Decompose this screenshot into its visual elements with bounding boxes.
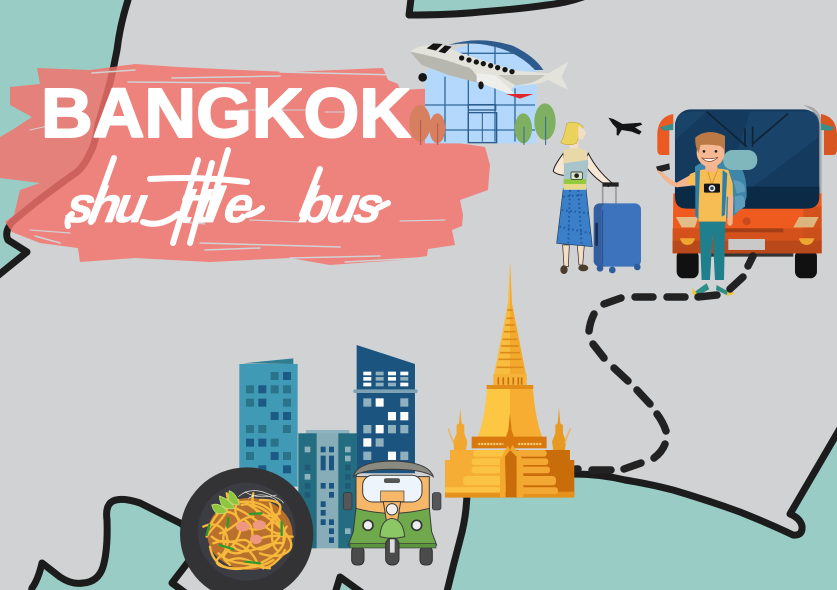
- icon: airport terminal: [425, 40, 543, 143]
- icon: golden temple: [445, 262, 574, 498]
- subtitle: shuttle bus: [62, 150, 389, 243]
- icon: small black plane: [608, 118, 642, 136]
- icon: city skyline: [239, 345, 418, 548]
- icon: tuk-tuk: [343, 461, 441, 565]
- icon: plate of pad thai: [180, 467, 313, 590]
- group: bottom illustrations: [180, 262, 574, 590]
- heading: BANGKOK: BANGKOK: [41, 74, 411, 152]
- title brush stroke: [0, 64, 490, 265]
- icon: orange bus: [657, 105, 837, 278]
- subtitle: shuttle bus: shuttle bus: [62, 176, 389, 233]
- male traveller: [656, 132, 757, 295]
- group: top illustrations: [409, 40, 837, 295]
- icon: airport trees: [409, 103, 556, 145]
- icon: blue suitcase: [594, 182, 641, 273]
- route: dashed path: [576, 256, 753, 470]
- icon: airplane: [410, 43, 568, 99]
- woman traveller: [553, 122, 612, 274]
